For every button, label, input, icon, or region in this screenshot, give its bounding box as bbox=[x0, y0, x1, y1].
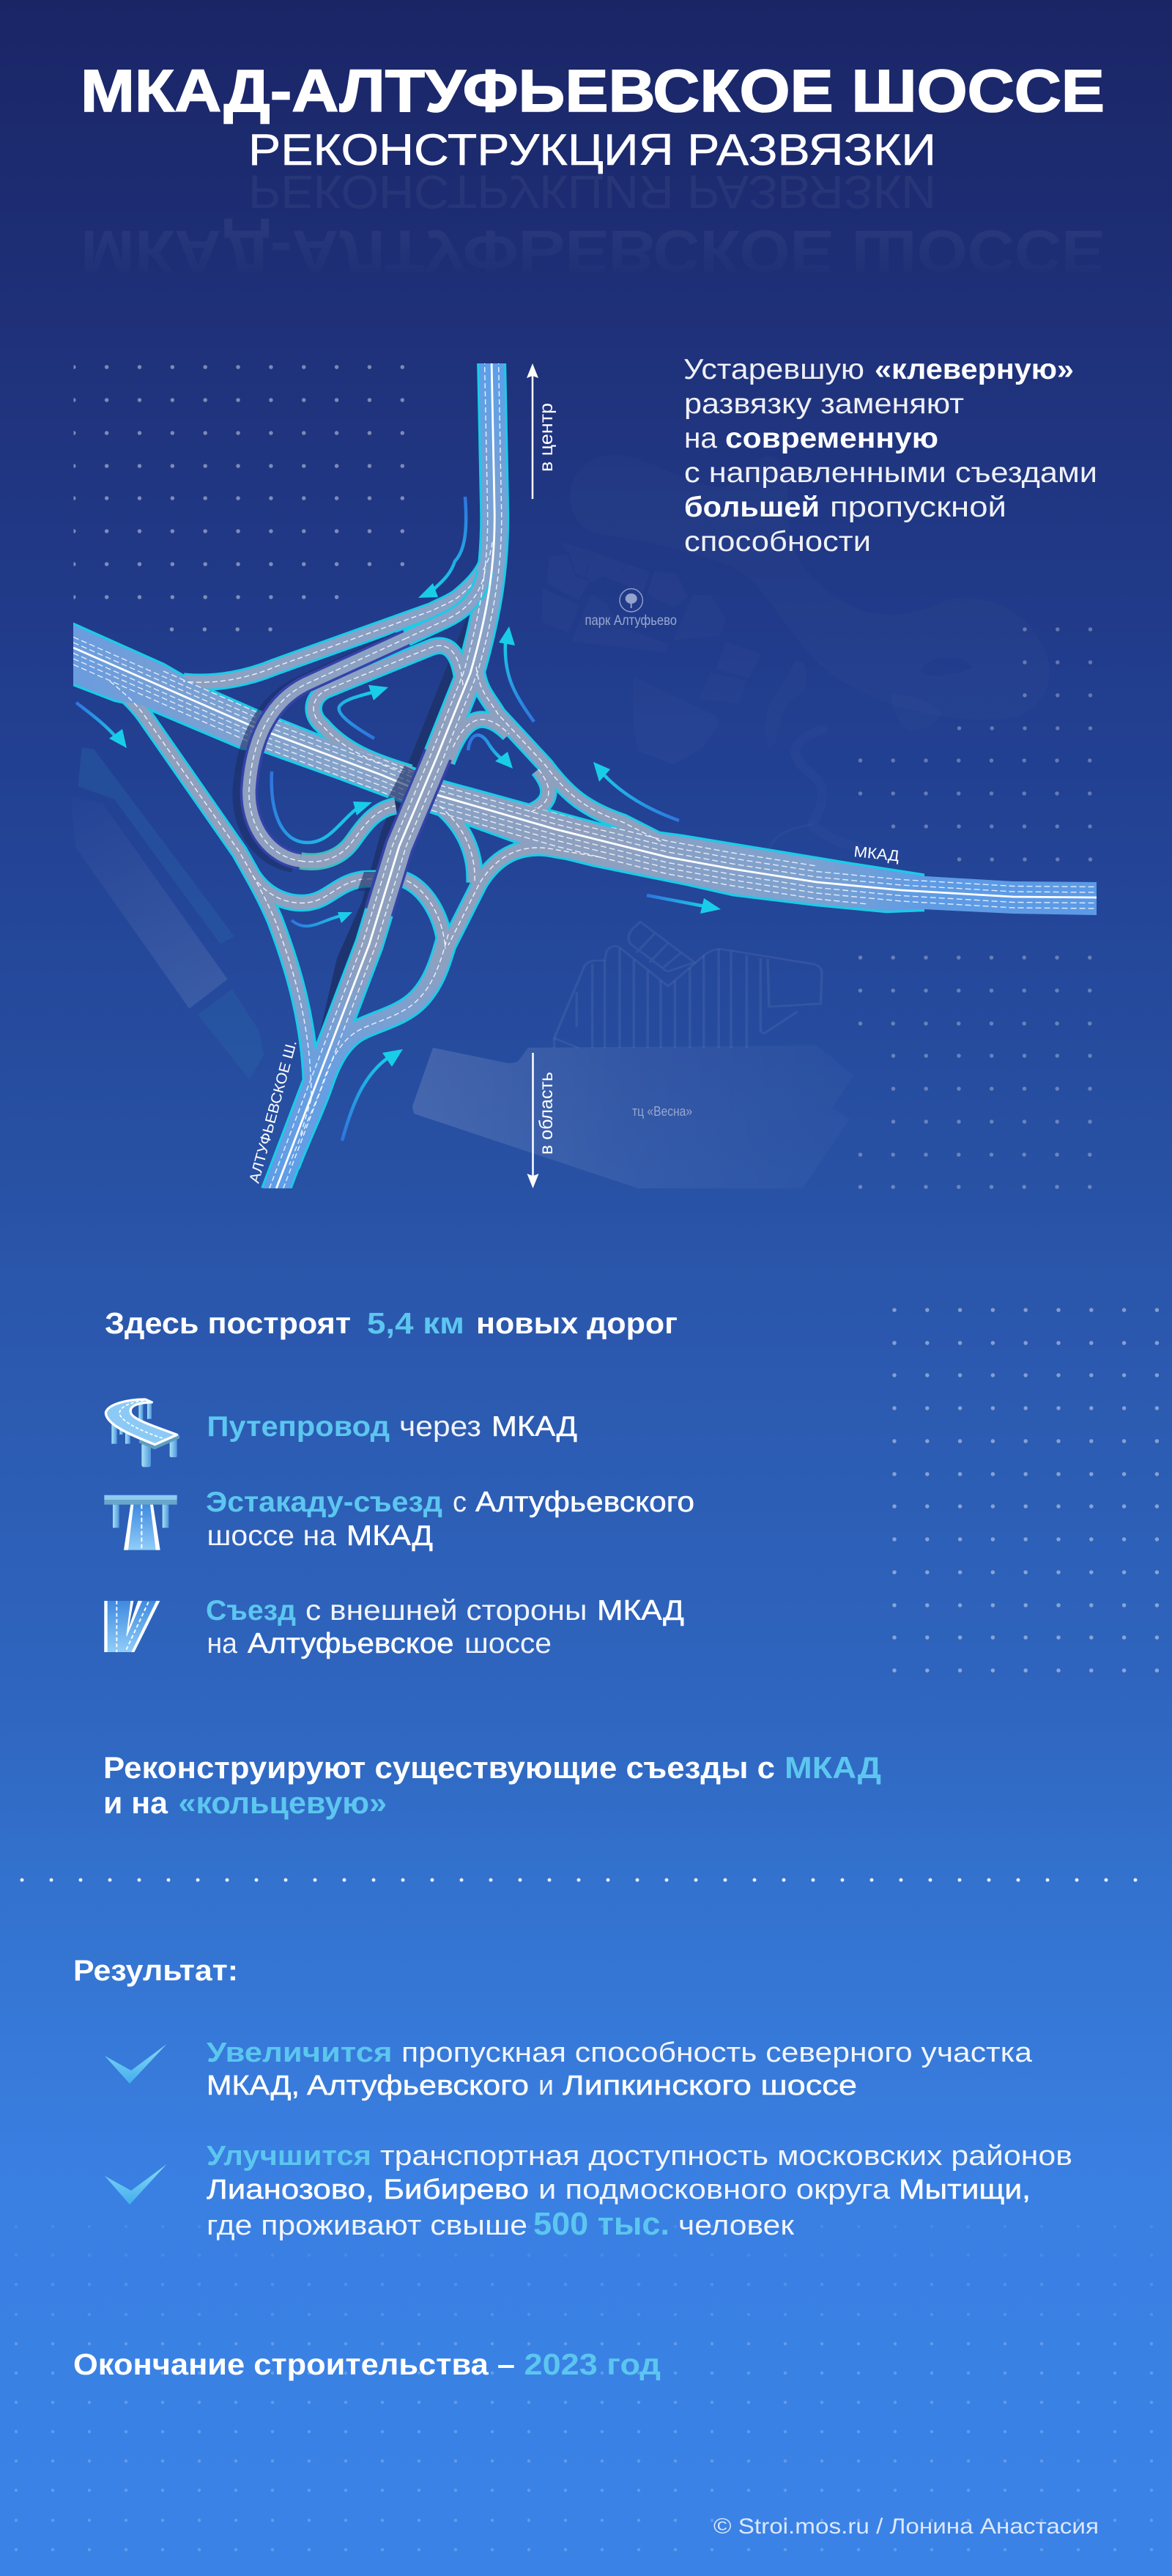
text: flyover: МКАД bbox=[346, 1520, 433, 1552]
Altufyevskoye overpass bbox=[268, 359, 502, 1193]
flow arrow 3 bbox=[339, 685, 388, 739]
completion date: Окончание строительства – bbox=[73, 2347, 515, 2381]
result item 2: 500 тыс. bbox=[533, 2206, 670, 2242]
flow arrow 6 bbox=[272, 771, 372, 843]
text: exit ramp: шоссе bbox=[464, 1628, 552, 1659]
road label: MKAD: МКАД bbox=[853, 843, 900, 865]
icon: overpass bbox=[105, 1399, 179, 1467]
intro text: на bbox=[684, 423, 717, 454]
result item 2: транспортная доступность московских районов bbox=[380, 2141, 1072, 2172]
flow arrow 10 bbox=[647, 895, 721, 914]
text: reconstruction: и на bbox=[103, 1785, 168, 1820]
title bbox=[81, 58, 1105, 174]
text: overpass: через bbox=[399, 1411, 481, 1443]
MKAD lane markings bbox=[73, 637, 1097, 908]
icon: park tree bbox=[620, 589, 642, 612]
intro text: большей bbox=[684, 492, 820, 523]
road surfaces bbox=[73, 359, 1097, 1193]
flow arrow 5 bbox=[468, 735, 513, 769]
title: МКАД-АЛТУФЬЕВСКОЕ ШОССЕ bbox=[81, 58, 1105, 125]
result item 2: Улучшится bbox=[207, 2141, 371, 2172]
label: park: парк Алтуфьево bbox=[585, 612, 677, 629]
text: flyover: шоссе на bbox=[207, 1520, 336, 1552]
loop overpass bbox=[242, 571, 485, 863]
direction arrow: to region: в область bbox=[536, 1072, 557, 1155]
background: mall building outlines bbox=[555, 922, 822, 1048]
direction arrow: to region bbox=[527, 1053, 557, 1188]
text: overpass bbox=[207, 1411, 577, 1443]
text: exit ramp bbox=[206, 1595, 684, 1659]
background: left buildings bbox=[71, 747, 264, 1080]
text: reconstruction bbox=[103, 1750, 881, 1820]
text: flyover: Эстакаду-съезд bbox=[206, 1487, 442, 1518]
result item 1 bbox=[207, 2038, 1033, 2101]
intro text: современную bbox=[725, 423, 938, 454]
map: interchange bbox=[71, 359, 1097, 1193]
icon: exit ramp bbox=[104, 1601, 160, 1652]
heading: new roads bbox=[105, 1306, 678, 1340]
road outlines bbox=[73, 363, 924, 1188]
dotted divider bbox=[22, 1879, 1165, 1881]
result item 2: где проживают свыше bbox=[207, 2210, 527, 2241]
icon: flyover bbox=[104, 1495, 177, 1550]
dot grid: middle right bbox=[894, 1310, 1158, 1670]
result item 2: человек bbox=[678, 2210, 794, 2241]
dot grid: right of map bbox=[860, 629, 1091, 1187]
text: exit ramp: Съезд bbox=[206, 1595, 296, 1626]
icon: check 1 bbox=[105, 2044, 167, 2084]
dot grid: bottom bbox=[16, 2227, 1172, 2550]
title reflection: МКАД-АЛТУФЬЕВСКОЕ ШОССЕ bbox=[81, 218, 1105, 284]
intro text: пропускной bbox=[830, 492, 1006, 523]
text: exit ramp: Алтуфьевское bbox=[248, 1628, 454, 1659]
ramp lane markings bbox=[110, 542, 663, 1165]
title reflection: РЕКОНСТРУКЦИЯ РАЗВЯЗКИ bbox=[248, 166, 936, 218]
text: overpass: Путепровод bbox=[207, 1411, 390, 1443]
heading: new roads: 5,4 км bbox=[367, 1306, 464, 1340]
text: flyover: с bbox=[453, 1487, 467, 1518]
background: mall Vesna bbox=[412, 1045, 853, 1188]
dot grid: upper left of map bbox=[74, 367, 435, 629]
result item 1: Липкинского шоссе bbox=[563, 2070, 857, 2101]
result item 2: и подмосковного округа bbox=[538, 2175, 891, 2205]
text: exit ramp: МКАД bbox=[597, 1595, 684, 1626]
result item 1: пропускная способность северного участка bbox=[401, 2038, 1033, 2068]
text: flyover: Алтуфьевского bbox=[475, 1487, 694, 1518]
intro text: развязку заменяют bbox=[684, 388, 964, 420]
text: exit ramp: на bbox=[207, 1628, 237, 1659]
shade of overpass on roads bbox=[357, 766, 429, 891]
intro text: с направленными съездами bbox=[684, 457, 1097, 489]
flow arrow 7 bbox=[292, 912, 352, 926]
heading: new roads: Здесь построят bbox=[105, 1306, 351, 1340]
background: park blocks bbox=[542, 542, 761, 765]
direction arrow: to center bbox=[527, 363, 557, 499]
heading: new roads: новых дорог bbox=[476, 1306, 678, 1340]
text: exit ramp: с внешней стороны bbox=[305, 1595, 587, 1626]
text: reconstruction: МКАД bbox=[785, 1750, 881, 1785]
result item 1: Алтуфьевского bbox=[307, 2070, 529, 2101]
copyright: © Stroi.mos.ru / Лонина Анастасия bbox=[713, 2514, 1099, 2539]
intro text: Устаревшую bbox=[683, 354, 864, 385]
text: flyover bbox=[206, 1487, 694, 1552]
result item 1: МКАД, bbox=[207, 2070, 300, 2101]
road label: Altufyevskoye: АЛТУФЬЕВСКОЕ Ш. bbox=[247, 1038, 300, 1185]
icon: check 2 bbox=[105, 2164, 167, 2205]
result item 1: и bbox=[538, 2070, 554, 2101]
intro text: способности bbox=[684, 526, 871, 558]
result item 1: Увеличится bbox=[207, 2038, 393, 2068]
text: reconstruction: Реконструируют существующие съезды с bbox=[103, 1750, 775, 1785]
title: РЕКОНСТРУКЦИЯ РАЗВЯЗКИ bbox=[248, 125, 936, 174]
flow arrow 2 bbox=[76, 703, 127, 748]
shadow of elevated road bbox=[315, 612, 469, 1054]
completion date: 2023 год bbox=[524, 2347, 661, 2381]
result item 2 bbox=[207, 2141, 1072, 2242]
text: reconstruction: «кольцевую» bbox=[179, 1785, 387, 1820]
label: mall: тц «Весна» bbox=[632, 1104, 692, 1119]
result item 2: Мытищи, bbox=[899, 2175, 1031, 2205]
direction arrow: to center: в центр bbox=[536, 403, 557, 472]
text: overpass: МКАД bbox=[492, 1411, 577, 1443]
intro text: «клеверную» bbox=[875, 354, 1074, 385]
flow arrow 1 bbox=[418, 497, 466, 598]
intro text bbox=[683, 354, 1097, 558]
title reflection bbox=[81, 166, 1105, 284]
background: park water and river bbox=[570, 455, 1050, 849]
result item 2: Лианозово, Бибирево bbox=[207, 2175, 529, 2205]
heading: result: Результат: bbox=[73, 1955, 238, 1987]
flow arrow 9 bbox=[593, 762, 679, 821]
flow arrow 8 bbox=[342, 1049, 403, 1141]
flow arrow 4 bbox=[499, 626, 534, 722]
